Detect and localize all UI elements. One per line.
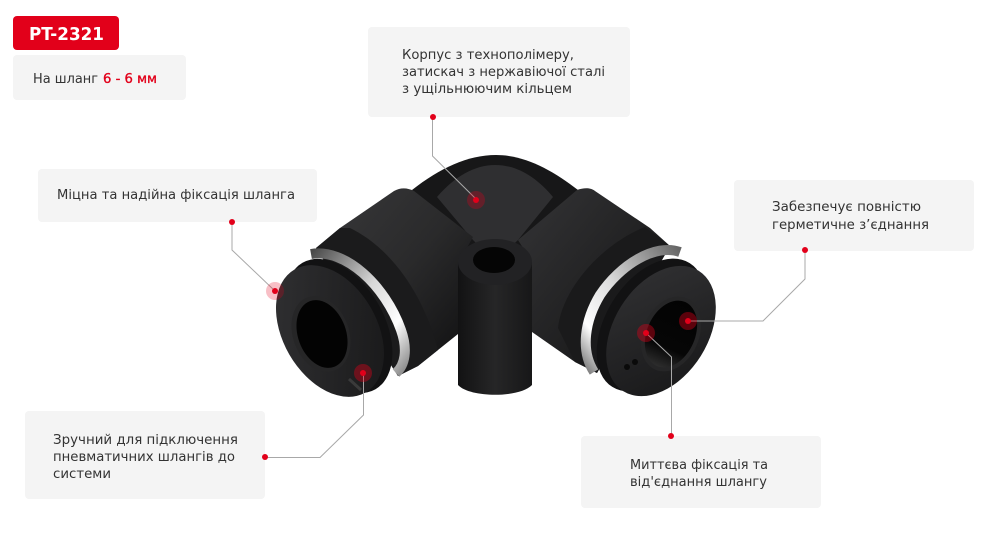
panel: convenient connection: Зручний для підключення — [53, 433, 238, 448]
right barrel step — [558, 227, 670, 373]
panel: hose size: На шланг — [33, 72, 98, 87]
product badge: PT-2321 — [29, 24, 104, 45]
panel: body material — [368, 27, 630, 117]
product photo: elbow connector — [254, 155, 738, 416]
left barrel step — [316, 228, 438, 376]
panel: instant fixation: Миттєва фіксація та — [630, 458, 768, 473]
panel: instant fixation: від'єднання шлангу — [630, 475, 767, 490]
left hole — [281, 288, 361, 380]
panel: convenient connection — [25, 411, 265, 499]
panel: reliable fixation — [38, 169, 317, 222]
panel: convenient connection: пневматичних шлангів до — [53, 450, 235, 465]
panel: body material: Корпус з технополімеру, — [402, 48, 574, 63]
right cap — [584, 246, 738, 416]
panel: body material: затискач з нержавіючої сталі — [402, 65, 605, 80]
elbow top band — [412, 155, 578, 280]
panel: body material: з ущільнюючим кільцем — [402, 82, 572, 97]
product badge — [13, 16, 119, 50]
left cap — [254, 246, 406, 416]
right barrel — [518, 188, 670, 373]
elbow inner surface — [437, 165, 553, 262]
callout markers — [229, 114, 808, 460]
panel: hermetic connection: герметичне з’єднання — [772, 218, 929, 233]
panel: hose size: 6 - 6 мм — [103, 72, 157, 87]
right metal ring — [586, 250, 680, 372]
right cap moulded dots — [632, 359, 638, 365]
left cap notch — [349, 379, 361, 390]
panel: hermetic connection — [734, 180, 974, 251]
right hole — [630, 287, 712, 381]
leader lines — [232, 117, 805, 458]
panel: hose size — [13, 55, 186, 100]
panel: hermetic connection: Забезпечує повністю — [772, 200, 921, 215]
right black collar — [574, 239, 728, 411]
panel: reliable fixation: Міцна та надійна фіксація шланга — [57, 188, 295, 203]
left black collar — [264, 240, 414, 412]
panel: instant fixation — [581, 436, 821, 508]
panel: convenient connection: системи — [53, 467, 111, 482]
left metal ring — [311, 253, 405, 373]
central stub — [458, 262, 532, 395]
left barrel — [316, 188, 473, 376]
